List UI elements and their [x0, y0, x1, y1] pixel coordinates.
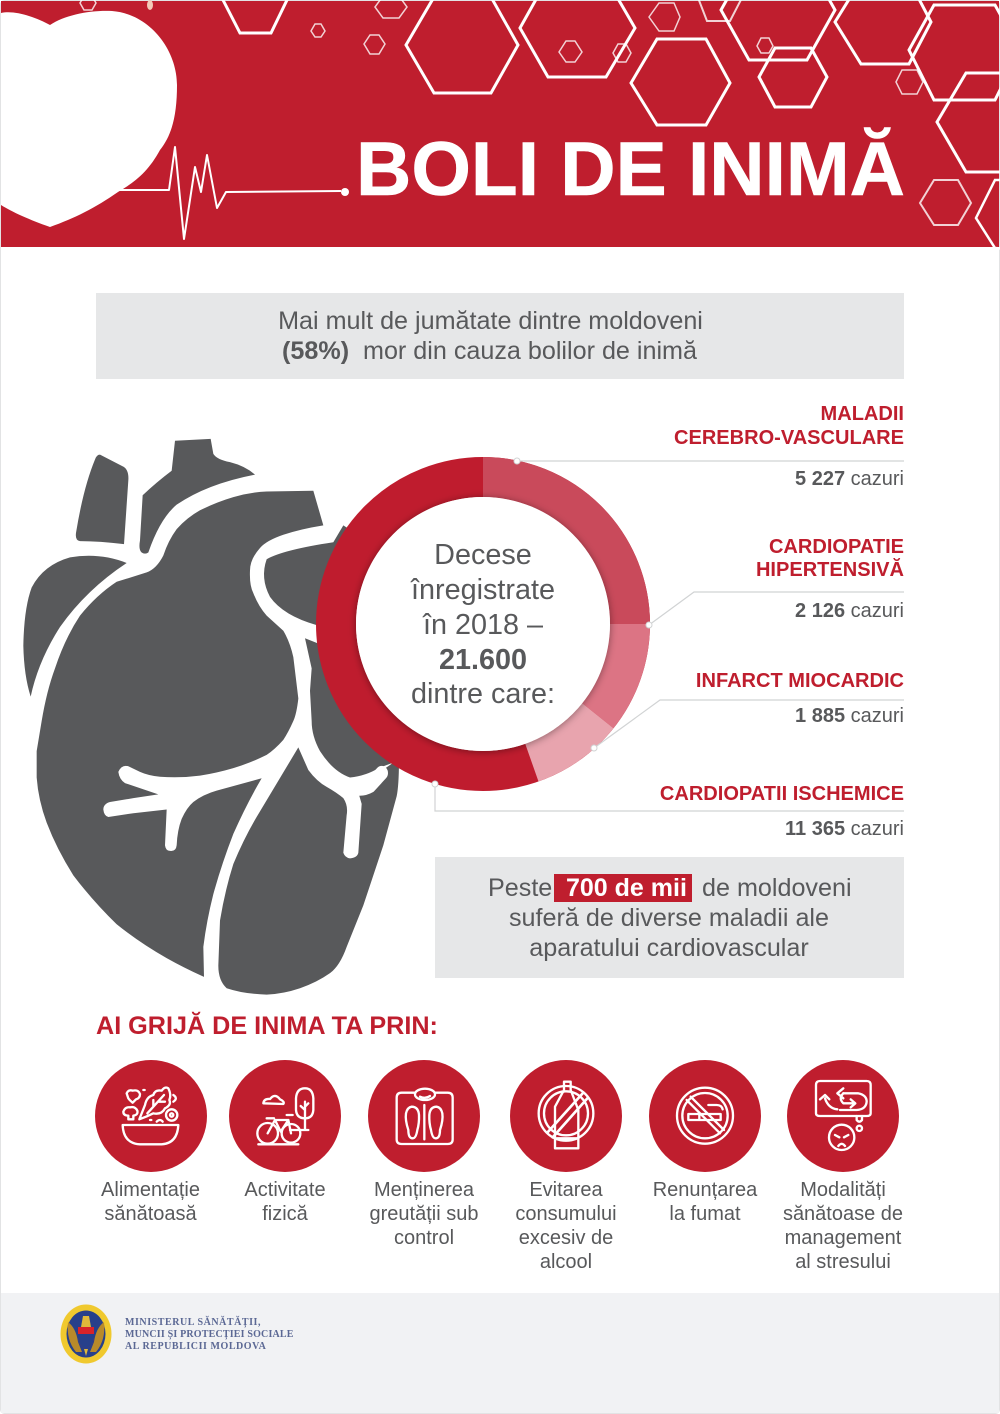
label: infarct miocardic: 1 885 cazuri — [795, 705, 904, 727]
label: cardiopatii ischemice: CARDIOPATII ISCHEMICE — [660, 783, 904, 805]
ministry name: MUNCII ȘI PROTECȚIEI SOCIALE — [125, 1329, 294, 1340]
ministry crest — [60, 1304, 112, 1364]
label: cardiopatie hipertensiva: HIPERTENSIVĂ — [756, 558, 904, 581]
icon: no alcohol — [539, 1082, 593, 1148]
icon: no smoking — [677, 1088, 733, 1144]
intro callout: mor din cauza bolilor de inimă — [363, 337, 697, 365]
callout: 700 de mii: suferă de diverse maladii ale — [509, 904, 829, 932]
caption: Menținerea — [374, 1179, 475, 1201]
caption — [244, 1179, 326, 1225]
icon: bicycle and tree — [257, 1088, 313, 1144]
label: maladii cerebro-vasculare: 5 227 cazuri — [795, 468, 904, 490]
segment: infarct miocardic — [525, 703, 614, 782]
intro callout: Mai mult de jumătate dintre moldoveni — [278, 307, 703, 335]
caption: management — [785, 1227, 902, 1249]
ECG line — [118, 147, 349, 239]
label: maladii cerebro-vasculare: CEREBRO-VASCULARE — [674, 427, 904, 449]
caption: alcool — [540, 1251, 592, 1273]
caption — [515, 1179, 617, 1273]
callout: 700 de mii: Peste — [488, 874, 552, 902]
caption: sănătoasă — [104, 1203, 198, 1225]
callout: 700 de mii: aparatului cardiovascular — [529, 934, 809, 962]
donut centre text: dintre care: — [411, 678, 555, 710]
segment: cardiopatie hipertensiva — [582, 624, 650, 728]
caption: Alimentație — [101, 1179, 200, 1201]
white heart shape — [1, 11, 177, 227]
label: cardiopatii ischemice: 11 365 cazuri — [785, 818, 904, 840]
label: cardiopatie hipertensiva: CARDIOPATIE — [769, 536, 904, 558]
icon: stress management — [816, 1081, 871, 1150]
caption — [101, 1179, 200, 1225]
step: alimentatie — [95, 1060, 207, 1225]
label: maladii cerebro-vasculare — [514, 403, 904, 490]
caption — [783, 1179, 903, 1273]
footer — [1, 1293, 999, 1413]
caption: excesiv de — [519, 1227, 613, 1249]
section heading: AI GRIJĂ DE INIMA TA PRIN: — [96, 1011, 438, 1040]
caption: control — [394, 1227, 454, 1249]
label: maladii cerebro-vasculare: MALADII — [821, 403, 904, 425]
step: fumat — [649, 1060, 761, 1225]
caption: al stresului — [795, 1251, 891, 1273]
donut centre — [356, 497, 610, 751]
ministry name: MINISTERUL SĂNĂTĂȚII, — [125, 1316, 261, 1328]
donut centre text: înregistrate — [410, 574, 555, 606]
caption — [370, 1179, 478, 1249]
caption: fizică — [262, 1203, 309, 1225]
label: cardiopatie hipertensiva — [646, 536, 904, 628]
caption: sănătoase de — [783, 1203, 903, 1225]
caption: consumului — [515, 1203, 617, 1225]
step: greutate — [368, 1060, 480, 1249]
callout: 700 de mii — [435, 857, 904, 978]
step: activitate — [229, 1060, 341, 1225]
icon: bathroom scale — [397, 1089, 453, 1144]
intro callout: (58%) — [282, 337, 349, 365]
caption: Modalități — [800, 1179, 886, 1201]
title: BOLI DE INIMĂ — [356, 127, 905, 212]
donut centre text: Decese — [434, 539, 532, 571]
hexagon pattern — [80, 0, 1000, 250]
caption: Activitate — [244, 1179, 326, 1201]
segment: maladii cerebro-vasculare — [483, 457, 650, 624]
step: alcool — [510, 1060, 622, 1273]
icon: salad bowl — [123, 1088, 178, 1144]
callout: 700 de mii: 700 de mii — [566, 874, 687, 902]
step: stres — [783, 1060, 903, 1273]
label: cardiopatii ischemice — [432, 781, 904, 840]
caption: la fumat — [669, 1203, 741, 1225]
donut centre text — [410, 539, 555, 710]
caption: Renunțarea — [653, 1179, 758, 1201]
label: cardiopatie hipertensiva: 2 126 cazuri — [795, 600, 904, 622]
donut centre text: 21.600 — [439, 644, 527, 676]
caption: greutății sub — [370, 1203, 478, 1225]
intro callout — [96, 293, 904, 379]
label: infarct miocardic — [591, 670, 904, 751]
donut chart — [336, 457, 650, 782]
ministry name: AL REPUBLICII MOLDOVA — [125, 1341, 267, 1352]
label: infarct miocardic: INFARCT MIOCARDIC — [696, 670, 904, 692]
caption — [653, 1179, 758, 1225]
ministry name — [125, 1316, 294, 1352]
donut centre text: în 2018 – — [422, 609, 543, 641]
caption: Evitarea — [529, 1179, 604, 1201]
header banner — [1, 0, 1000, 250]
callout: 700 de mii: de moldoveni — [702, 874, 852, 902]
anatomical heart illustration — [23, 439, 399, 995]
